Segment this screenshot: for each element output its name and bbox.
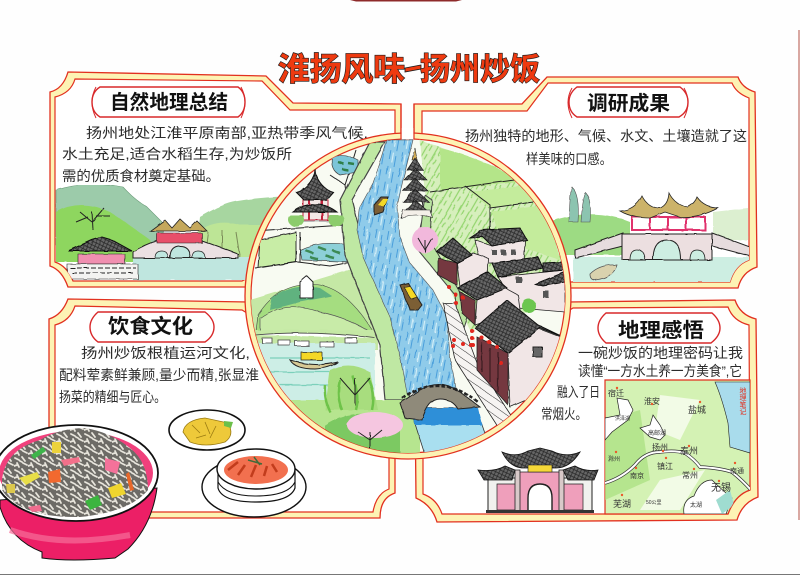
red lanterns bbox=[447, 285, 503, 365]
body text: 扬州地处江淮平原南部,亚热带季风气候, bbox=[86, 125, 368, 141]
map labels: 无锡 bbox=[711, 481, 731, 494]
panel frame bbox=[414, 77, 757, 288]
panel: research results bbox=[414, 77, 757, 288]
green riverbanks bbox=[290, 141, 468, 453]
panel frame bbox=[49, 299, 395, 518]
city markers bbox=[615, 387, 736, 496]
icon: bowl of fried rice bbox=[0, 425, 158, 560]
map labels: 南通 bbox=[730, 466, 744, 475]
body text: 融入了日 bbox=[557, 384, 600, 400]
heading label: 调研成果 bbox=[587, 91, 670, 115]
house: tower with lanterns bbox=[437, 238, 488, 287]
body text bbox=[465, 128, 747, 167]
stone arch bridge bbox=[400, 384, 480, 420]
blossom trees and willow bbox=[325, 227, 438, 460]
map labels: 淮安 bbox=[644, 396, 660, 406]
map labels: 记 bbox=[740, 408, 746, 416]
scene content bbox=[250, 140, 570, 460]
body text: 扬州独特的地形、气候、水文、土壤造就了这 bbox=[465, 128, 747, 144]
heading label bbox=[598, 313, 720, 343]
map labels: 扬州 bbox=[652, 442, 668, 452]
title: 扬州炒饭 bbox=[420, 52, 540, 87]
upper right fields bbox=[420, 140, 570, 330]
body text bbox=[62, 125, 368, 184]
house: upper right bbox=[470, 228, 527, 263]
body text: 扬菜的精细与匠心。 bbox=[59, 389, 166, 405]
map labels: 50公里 bbox=[646, 500, 662, 506]
map labels: 地 bbox=[740, 386, 746, 395]
boats bbox=[374, 197, 422, 310]
body text: 水土充足,适合水稻生存,为炒饭所 bbox=[62, 146, 292, 162]
house: large front bbox=[475, 300, 563, 407]
body text bbox=[59, 345, 259, 405]
circle ring bbox=[245, 104, 571, 459]
stone steps bbox=[443, 303, 512, 430]
landscape illustration: hills, pavilion and bridge bbox=[56, 184, 290, 280]
heading label bbox=[90, 312, 214, 342]
heading label: 地理感悟 bbox=[618, 319, 704, 342]
map labels bbox=[608, 386, 746, 509]
map labels: 笔 bbox=[740, 400, 746, 409]
panel frame bbox=[415, 300, 758, 522]
canal river bbox=[357, 140, 492, 455]
heading label bbox=[92, 87, 245, 118]
panel: food culture bbox=[0, 299, 395, 560]
map labels: 南京 bbox=[630, 471, 644, 480]
pagoda bbox=[401, 148, 433, 218]
heading label: 饮食文化 bbox=[108, 314, 193, 338]
map labels: 理 bbox=[740, 394, 746, 402]
heading label bbox=[568, 87, 688, 118]
riverside houses bbox=[437, 228, 565, 407]
map labels: 太湖 bbox=[690, 501, 702, 509]
panel frame bbox=[50, 72, 401, 287]
map labels: 常州 bbox=[682, 471, 698, 480]
icon: steamer basket dish bbox=[202, 449, 306, 517]
panel: natural geography summary bbox=[50, 72, 401, 287]
left gardens and hill bbox=[250, 150, 380, 400]
map labels: 宿迁 bbox=[608, 388, 624, 398]
body text: 配料荤素鲜兼顾,量少而精,张显淮 bbox=[59, 367, 259, 383]
body text bbox=[541, 345, 743, 422]
landscape illustration: five-pavilion bridge bbox=[540, 187, 750, 282]
central circular canal scene bbox=[245, 104, 571, 460]
body text: 常烟火。 bbox=[541, 406, 587, 422]
map labels: 滁州 bbox=[608, 455, 620, 463]
title bbox=[278, 51, 540, 87]
panel: geographic reflections bbox=[415, 300, 758, 522]
body text: 需的优质食材奠定基础。 bbox=[62, 168, 220, 184]
body text: 一碗炒饭的地理密码让我 bbox=[578, 345, 743, 361]
icon: ancient gate bbox=[478, 448, 598, 513]
house: middle bbox=[458, 272, 520, 325]
map labels: 泰州 bbox=[680, 445, 698, 456]
body text: 扬州炒饭根植运河文化, bbox=[81, 345, 250, 361]
heading label: 自然地理总结 bbox=[110, 90, 228, 114]
house: back row bbox=[492, 257, 565, 313]
body text: 样美味的口感。 bbox=[526, 151, 612, 167]
body text: 读懂“一方水土养一方美食”,它 bbox=[578, 363, 742, 379]
map labels: 芜湖 bbox=[613, 498, 631, 509]
map labels: 镇江 bbox=[657, 461, 673, 471]
title: 淮扬风味 bbox=[278, 51, 405, 87]
icon: yellow side dish plate bbox=[169, 410, 245, 450]
map of the Yangzhou region bbox=[605, 380, 751, 514]
pavilion on the left bbox=[288, 169, 344, 227]
map labels: 高邮湖 bbox=[648, 429, 666, 437]
map labels: 盐城 bbox=[688, 404, 706, 415]
map labels: 洪泽湖 bbox=[615, 415, 630, 422]
